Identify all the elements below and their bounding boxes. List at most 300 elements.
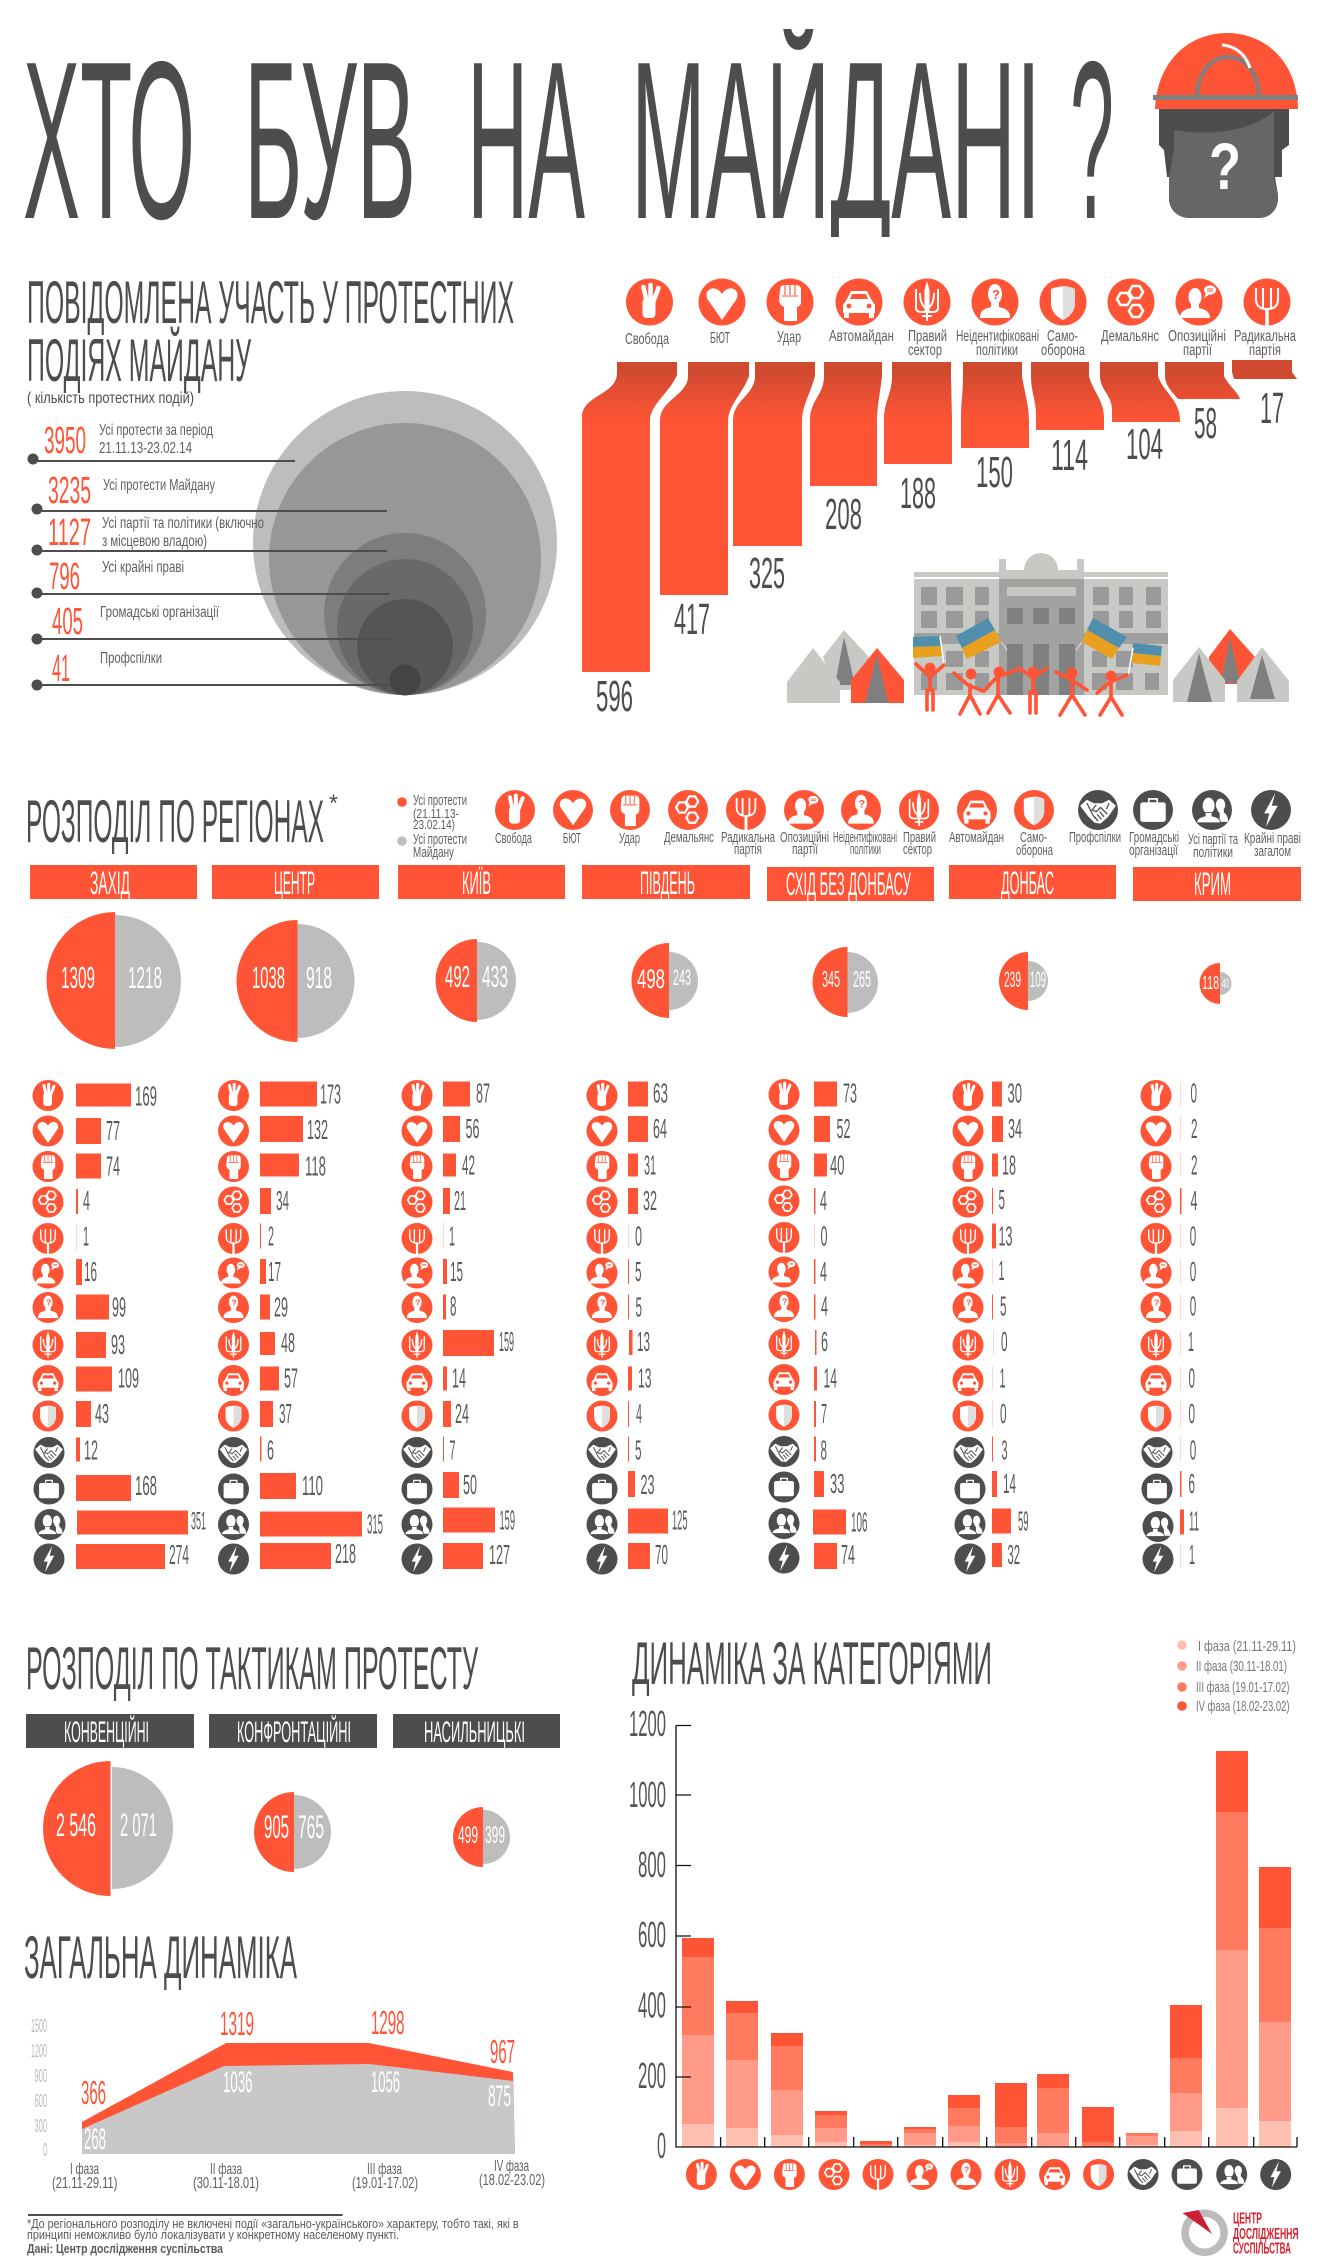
bar column: Донбас: 1 <box>998 1255 1004 1286</box>
icon: Опозиційні партії: Опозиційні <box>1168 328 1226 345</box>
ribbon: Автомайдан 208: 208 <box>825 490 862 539</box>
tents right <box>1173 629 1289 702</box>
bar column: Центр: 218 <box>335 1538 356 1569</box>
row: 3235 Maidan protests: 3235 <box>48 470 91 512</box>
ribbon: Демальянс 104: 104 <box>1126 420 1163 469</box>
bar column: Схід без Донбасу: 14 <box>824 1362 837 1394</box>
row: Опозиційні партії 15 <box>401 1256 463 1289</box>
bar column: Південь: 63 <box>653 1078 668 1108</box>
bar column: Київ: 14 <box>452 1362 466 1394</box>
building <box>914 553 1168 695</box>
bar column: Захід: 77 <box>106 1115 120 1146</box>
bar column: Крим: 4 <box>1190 1185 1198 1216</box>
area chart: overall dynamics: 1319 <box>220 2005 254 2042</box>
bar column: Київ: 8 <box>450 1290 456 1322</box>
row: Усі партії 315 <box>218 1508 383 1540</box>
row: Радикальна партія 1 <box>401 1220 455 1254</box>
row: Громадські організації 23 <box>586 1469 654 1505</box>
row: Правий сектор 1 <box>1140 1326 1194 1361</box>
icon: Свобода <box>625 278 673 348</box>
text: 159 <box>500 1504 515 1536</box>
area chart: overall dynamics: ІV фаза <box>494 2158 529 2175</box>
row: Удар 42 <box>401 1150 475 1182</box>
row: Громадські організації 50 <box>401 1469 477 1505</box>
bar column: Південь: 64 <box>653 1113 667 1144</box>
icon: Правий сектор: Правий <box>908 328 947 345</box>
title: ХТО <box>23 14 195 266</box>
row: Радикальна партія 2 <box>218 1220 274 1254</box>
row: Крайні праві 32 <box>954 1539 1020 1575</box>
row: Профспілки 0 <box>1141 1434 1196 1468</box>
row: Свобода 30 <box>952 1078 1022 1111</box>
text: 159 <box>499 1326 514 1357</box>
icon: protester in helmet with question mark: ? <box>1209 129 1241 203</box>
row: Самооборона 4 <box>586 1398 642 1432</box>
header: Київ: КИЇВ <box>462 865 491 901</box>
row: 796 far right: Усі крайні праві <box>102 559 184 576</box>
category icons under chart <box>686 2159 1291 2190</box>
row: 3950 all protests: 21.11.13-23.02.14 <box>99 440 192 457</box>
key: Усі партії та політики: Усі партії та <box>1188 831 1238 848</box>
key: Автомайдан <box>949 790 1004 846</box>
key: Автомайдан: Автомайдан <box>949 829 1004 846</box>
row: БЮТ 2 <box>1140 1113 1198 1147</box>
row: Свобода 63 <box>586 1078 668 1111</box>
bar column: Крим: 0 <box>1190 1434 1196 1466</box>
header: Центр: ЦЕНТР <box>274 865 315 901</box>
row: Автомайдан 14 <box>768 1362 837 1395</box>
icon: protester in helmet with question mark <box>1153 33 1298 218</box>
row: Самооборона 0 <box>1140 1398 1195 1432</box>
key: Демальянс <box>664 790 714 846</box>
icon: Самооборона <box>1040 278 1086 359</box>
row: Автомайдан 1 <box>952 1362 1006 1396</box>
bar: Неідентифіковані <box>948 2095 980 2147</box>
region headers: СХІД БЕЗ ДОНБАСУ <box>786 866 911 902</box>
text: РОЗПОДІЛ ПО РЕГІОНАХ <box>26 788 324 855</box>
header: Донбас <box>949 865 1116 901</box>
bar column: Донбас: 14 <box>1003 1468 1016 1499</box>
bar column: Київ: 127 <box>489 1539 510 1570</box>
half circles: Київ: 492 <box>445 959 470 994</box>
key: Демальянс: Демальянс <box>664 829 714 846</box>
key: Самооборона: оборона <box>1016 842 1053 859</box>
row: Громадські організації 33 <box>768 1468 844 1503</box>
row: Профспілки 6 <box>218 1434 274 1468</box>
row: БЮТ 34 <box>952 1113 1022 1147</box>
half circles: Центр: 918 <box>306 960 332 995</box>
bar column: Донбас: 1 <box>1000 1362 1006 1394</box>
bar column: Південь: 5 <box>636 1292 642 1322</box>
ribbon: Неідентифіковані 150 <box>961 362 1029 497</box>
row: Автомайдан 109 <box>32 1362 139 1396</box>
area chart: overall dynamics: 1500 <box>31 2016 47 2036</box>
row: 1127 parties and politicians <box>32 512 387 556</box>
row: 3950 all protests: Усі протести за період <box>99 422 213 439</box>
icon: Правий сектор <box>904 278 950 359</box>
bar column: Захід: 12 <box>84 1434 98 1466</box>
category icon key <box>495 790 1301 861</box>
area chart: overall dynamics: (18.02-23.02) <box>479 2172 545 2189</box>
region half-circle charts <box>46 912 1231 1049</box>
protesters <box>916 664 1127 715</box>
ribbon: Опозиційні партії 58: 58 <box>1194 399 1217 448</box>
legend: red and gray halves: Усі протести <box>413 831 467 848</box>
row: Удар 18 <box>952 1150 1016 1182</box>
row: Усі партії 11 <box>1142 1506 1199 1542</box>
row: Свобода 0 <box>1140 1078 1197 1111</box>
bar column: Центр: 132 <box>307 1114 328 1145</box>
header: Схід без Донбасу <box>767 866 934 902</box>
half circles: Схід без Донбасу <box>812 947 878 1017</box>
bar column: Крим: 0 <box>1188 1398 1195 1429</box>
bar column: Центр: 17 <box>268 1256 281 1287</box>
bar column: Донбас: 34 <box>1008 1113 1022 1144</box>
logo: Центр дослідження суспільства: ЦЕНТР <box>1233 2211 1262 2228</box>
bar: Профспілки <box>1126 2133 1158 2147</box>
legend: red and gray halves: Усі протести <box>413 792 467 809</box>
row: 3235 Maidan protests <box>32 470 387 514</box>
bar column: Схід без Донбасу: 33 <box>830 1468 844 1499</box>
key: Опозиційні партії: партії <box>792 841 819 858</box>
heading: reported participation: ПОДІЯХ МАЙДАНУ <box>27 327 251 394</box>
key: Опозиційні партії <box>780 790 829 858</box>
row: БЮТ 77 <box>32 1115 120 1147</box>
row: Свобода 173 <box>218 1078 341 1111</box>
bar column: Центр: 110 <box>302 1470 323 1501</box>
chart axes and labels: 0 <box>657 2125 666 2166</box>
header: Захід: ЗАХІД <box>90 865 130 901</box>
key: Удар <box>610 790 650 847</box>
bar: Громадські організації <box>1170 2005 1202 2147</box>
bar column: Київ: 7 <box>450 1434 456 1466</box>
heading: reported participation: ( кількість протестних подій) <box>27 390 194 407</box>
icon: БЮТ: БЮТ <box>710 330 730 347</box>
bar: Радикальна партія <box>860 2141 892 2147</box>
area chart: overall dynamics: (21.11-29.11) <box>52 2175 118 2192</box>
row: Удар 31 <box>586 1150 656 1182</box>
half circles: Донбас <box>999 952 1048 1010</box>
bar column: Донбас: 30 <box>1008 1078 1022 1108</box>
area chart: overall dynamics: (30.11-18.01) <box>193 2175 259 2192</box>
half circles: Центр <box>236 920 354 1042</box>
text: 315 <box>367 1508 383 1540</box>
text: 125 <box>672 1504 688 1536</box>
bar column: Південь: 32 <box>643 1185 657 1216</box>
logo: Центр дослідження суспільства <box>1182 2210 1299 2258</box>
title: БУВ <box>244 14 416 266</box>
row: БЮТ 132 <box>218 1114 328 1147</box>
bar column: Схід без Донбасу: 4 <box>820 1256 827 1287</box>
row: Усі партії 351 <box>34 1508 206 1540</box>
ribbon bar chart <box>582 360 1297 721</box>
ribbon: Радикальна партія 17: 17 <box>1260 384 1284 433</box>
bar column: Київ <box>401 1078 515 1575</box>
heading: reported participation <box>27 269 514 407</box>
key: БЮТ: БЮТ <box>563 830 581 847</box>
bar column: Центр: 6 <box>267 1434 274 1466</box>
ribbon: БЮТ 417: 417 <box>674 595 710 644</box>
row: Опозиційні партії 4 <box>768 1256 827 1288</box>
icon: Свобода: Свобода <box>625 331 669 348</box>
header: Південь: ПІВДЕНЬ <box>640 865 695 901</box>
bar column: Донбас: 3 <box>1002 1434 1008 1466</box>
bar column: Крим: 1 <box>1189 1539 1195 1570</box>
ribbon: Правий сектор 188 <box>884 362 952 518</box>
text: ПОВІДОМЛЕНА УЧАСТЬ У ПРОТЕСТНИХ <box>27 269 514 336</box>
bar column: Захід: 168 <box>135 1470 157 1501</box>
legend: red and gray halves: (21.11.13- <box>413 806 459 821</box>
icon: Автомайдан: Автомайдан <box>829 328 894 345</box>
bar column: Донбас: 32 <box>1008 1539 1020 1570</box>
bar column: Південь: 31 <box>644 1150 656 1180</box>
row: Крайні праві 274 <box>33 1539 189 1575</box>
key: Радикальна партія: Радикальна <box>721 829 775 846</box>
row: Автомайдан 0 <box>1140 1362 1195 1396</box>
title <box>25 29 1112 237</box>
text: 59 <box>1018 1506 1028 1536</box>
row: Крайні праві 70 <box>586 1539 668 1575</box>
row: 3950 all protests <box>28 420 295 464</box>
ribbon: Свобода 596: 596 <box>596 672 633 721</box>
bar column: Центр: 29 <box>274 1292 288 1322</box>
bar: Удар <box>771 2033 803 2147</box>
header: Донбас: ДОНБАС <box>1001 865 1054 901</box>
row: 3235 Maidan protests: Усі протести Майдану <box>103 477 215 494</box>
bar column: Київ: 50 <box>463 1469 477 1500</box>
bar column: Схід без Донбасу: 73 <box>843 1078 857 1108</box>
bar column: Крим: 6 <box>1188 1468 1195 1499</box>
ribbon: Самооборона 114 <box>1031 362 1104 480</box>
panel: conventional <box>26 1714 194 1896</box>
row: Удар 40 <box>768 1150 844 1181</box>
bar column: Київ: 15 <box>450 1256 463 1287</box>
area chart: overall dynamics: 1200 <box>31 2041 47 2061</box>
row: Громадські організації 14 <box>954 1468 1016 1505</box>
icon: Неідентифіковані політики: політики <box>976 342 1018 359</box>
area chart: overall dynamics: (19.01-17.02) <box>352 2175 418 2192</box>
icon: Опозиційні партії: партії <box>1183 342 1212 359</box>
row: Крайні праві 74 <box>768 1539 855 1574</box>
key: Громадські організації: організації <box>1129 842 1179 859</box>
header: Крим: КРИМ <box>1194 866 1231 902</box>
row: Самооборона 0 <box>952 1398 1006 1432</box>
row: Громадські організації 110 <box>218 1470 323 1505</box>
bar: Свобода <box>682 1938 714 2147</box>
bar column: Донбас: 13 <box>998 1220 1012 1252</box>
bar column: Південь: 70 <box>655 1539 668 1570</box>
bar column: Схід без Донбасу: 0 <box>820 1220 828 1252</box>
row: Профспілки 8 <box>768 1434 827 1467</box>
panel: confrontational <box>209 1714 377 1872</box>
ribbon: Неідентифіковані 150: 150 <box>976 448 1013 497</box>
half circles: Південь: 498 <box>637 964 665 994</box>
row: Удар 74 <box>32 1150 120 1182</box>
row: Демальянс 32 <box>586 1185 657 1218</box>
bar: БЮТ <box>726 2001 758 2147</box>
icon: Удар <box>766 278 814 346</box>
bar column: Захід: 99 <box>112 1292 126 1322</box>
circle legend rows <box>28 420 390 690</box>
bar column: Крим: 0 <box>1190 1256 1196 1287</box>
row: Профспілки 5 <box>586 1434 642 1468</box>
area chart: overall dynamics: 1056 <box>371 2066 400 2099</box>
half circles: Південь <box>632 943 698 1018</box>
bar column: Південь: 4 <box>636 1398 642 1429</box>
bar column: Південь <box>586 1078 688 1575</box>
panel: violent <box>393 1714 560 1867</box>
row: Демальянс 5 <box>952 1184 1005 1218</box>
half circles: Захід: 1309 <box>61 960 95 995</box>
bar column: Крим <box>1140 1078 1199 1575</box>
area chart: overall dynamics: І фаза <box>70 2161 99 2178</box>
area chart: overall dynamics <box>31 2004 545 2192</box>
half circles: Крим <box>1199 963 1232 1004</box>
icon: БЮТ <box>698 278 746 347</box>
row: Крайні праві 127 <box>401 1539 510 1575</box>
key: Радикальна партія: партія <box>734 841 762 858</box>
flags <box>913 618 1162 676</box>
ribbon: Самооборона 114: 114 <box>1051 431 1088 480</box>
footnote and source <box>27 2214 519 2256</box>
row: Самооборона 43 <box>32 1398 109 1432</box>
row: Правий сектор 6 <box>768 1326 828 1360</box>
header: Захід <box>30 865 197 901</box>
half circles: Київ <box>436 939 516 1022</box>
bar column: Крим: 1 <box>1188 1326 1194 1357</box>
half circles: Центр: 1038 <box>252 960 285 995</box>
bar column: Південь: 13 <box>638 1362 652 1394</box>
row: Громадські організації 168 <box>33 1470 157 1505</box>
row: Опозиційні партії 16 <box>32 1256 97 1289</box>
icon: Удар: Удар <box>777 329 801 346</box>
bar column: Київ: 21 <box>454 1185 466 1216</box>
row: Самооборона 24 <box>401 1398 469 1432</box>
area chart: overall dynamics: 268 <box>84 2123 106 2156</box>
row: Неідентифіковані 4 <box>768 1290 828 1322</box>
bar column: Центр: 57 <box>284 1362 298 1394</box>
text: 351 <box>191 1508 206 1536</box>
half circles: Південь: 243 <box>673 965 691 990</box>
key: Радикальна партія <box>721 790 775 858</box>
row: Радикальна партія 1 <box>32 1220 89 1254</box>
region half-circle charts: 109 <box>1030 967 1046 992</box>
bar column: Захід <box>32 1080 206 1575</box>
bar column: Крим: 0 <box>1190 1290 1196 1322</box>
bar column: Крим: 0 <box>1190 1220 1196 1252</box>
area chart: overall dynamics: ІІІ фаза <box>367 2161 402 2178</box>
bar column: Центр: 48 <box>281 1327 295 1358</box>
half circles: Схід без Донбасу: 265 <box>853 966 871 992</box>
row: Профспілки 7 <box>401 1434 456 1468</box>
bar column: Південь: 5 <box>635 1256 642 1287</box>
area chart: overall dynamics: 366 <box>81 2074 106 2111</box>
area chart: overall dynamics: 600 <box>34 2091 47 2111</box>
key: Громадські організації: Громадські <box>1129 829 1179 846</box>
chart axes and labels: 600 <box>638 1914 666 1955</box>
row: 41 trade unions: Профспілки <box>100 650 162 667</box>
row: Демальянс 4 <box>32 1185 90 1218</box>
row: Неідентифіковані 8 <box>401 1290 456 1323</box>
footnote and source: Дані: Центр дослідження суспільства <box>27 2241 224 2256</box>
area chart: overall dynamics: 0 <box>43 2140 48 2160</box>
bar: Опозиційні партії <box>904 2127 936 2147</box>
row: 41 trade unions <box>32 648 389 690</box>
bar column: Схід без Донбасу: 4 <box>820 1185 827 1216</box>
bar column: Схід без Донбасу: 8 <box>820 1434 827 1466</box>
row: Автомайдан 14 <box>401 1362 466 1396</box>
row: 1127 parties and politicians: з місцевою владою) <box>102 533 207 550</box>
bar column: Захід: 1 <box>83 1220 89 1252</box>
ribbon: Правий сектор 188: 188 <box>900 469 936 518</box>
chart axes and labels: 1000 <box>629 1774 666 1815</box>
bar column: Крим: 0 <box>1188 1362 1195 1394</box>
row: Опозиційні партії 1 <box>952 1255 1004 1289</box>
key: Крайні праві загалом: загалом <box>1254 843 1291 860</box>
bar column: Центр: 34 <box>276 1185 289 1216</box>
ribbon: Радикальна партія 17 <box>1232 360 1297 433</box>
row: Громадські організації 6 <box>1141 1468 1195 1505</box>
half circles: Захід: 1218 <box>128 960 162 995</box>
row: 41 trade unions: 41 <box>52 648 70 690</box>
panel: confrontational: КОНФРОНТАЦІЙНІ <box>237 1715 351 1749</box>
panel: confrontational: 765 <box>298 1809 324 1845</box>
row: 1127 parties and politicians: 1127 <box>48 512 91 554</box>
key: Крайні праві загалом <box>1244 790 1301 860</box>
ribbon: Свобода 596 <box>582 362 677 721</box>
icon: Демальянс <box>1101 278 1159 345</box>
key: Самооборона: Само- <box>1020 829 1047 846</box>
bar column: Донбас <box>952 1078 1028 1575</box>
text: РОЗПОДІЛ ПО ТАКТИКАМ ПРОТЕСТУ <box>26 1635 478 1702</box>
row: Неідентифіковані 29 <box>218 1292 288 1323</box>
icon: Демальянс: Демальянс <box>1101 328 1159 345</box>
icon: Автомайдан <box>829 278 894 345</box>
row: БЮТ 64 <box>586 1113 667 1147</box>
panel: violent: 399 <box>485 1822 505 1849</box>
title: НА <box>467 14 585 266</box>
row: Радикальна партія 0 <box>1140 1220 1196 1254</box>
bar column: Центр: 118 <box>305 1150 326 1182</box>
key: Свобода <box>495 790 535 847</box>
row: 3950 all protests: 3950 <box>44 420 86 462</box>
footnote and source: принципі неможливо було локалізувати у конкретному населеному пункті. <box>27 2227 399 2242</box>
bar column: Донбас: 5 <box>1000 1290 1006 1322</box>
area chart: overall dynamics: ІІ фаза <box>210 2161 242 2178</box>
row: Крайні праві 218 <box>218 1538 356 1575</box>
row: Свобода 73 <box>768 1078 857 1110</box>
row: Неідентифіковані 5 <box>586 1292 642 1323</box>
key: Профспілки: Профспілки <box>1069 829 1121 846</box>
key: Неідентифіковані політики: політики <box>850 841 881 858</box>
half circles: Київ: 433 <box>482 959 508 994</box>
half circles: Схід без Донбасу: 345 <box>822 966 840 992</box>
row: Усі партії 59 <box>954 1506 1028 1540</box>
legend: red and gray halves <box>397 792 467 861</box>
bar column: Крим: 2 <box>1191 1150 1198 1180</box>
key: Профспілки <box>1069 790 1121 846</box>
bar column: Захід: 109 <box>118 1362 139 1394</box>
bar column: Київ: 87 <box>476 1078 490 1108</box>
bar: Усі партії <box>1216 1751 1248 2147</box>
row: Правий сектор 159 <box>401 1326 514 1361</box>
text: 11 <box>1189 1506 1199 1536</box>
row: Опозиційні партії 17 <box>218 1256 281 1289</box>
bar: Автомайдан <box>1037 2074 1069 2147</box>
bar column: Південь: 0 <box>635 1220 642 1252</box>
bar column: Донбас: 18 <box>1002 1150 1016 1180</box>
row: 405 civic organisations <box>32 601 389 644</box>
